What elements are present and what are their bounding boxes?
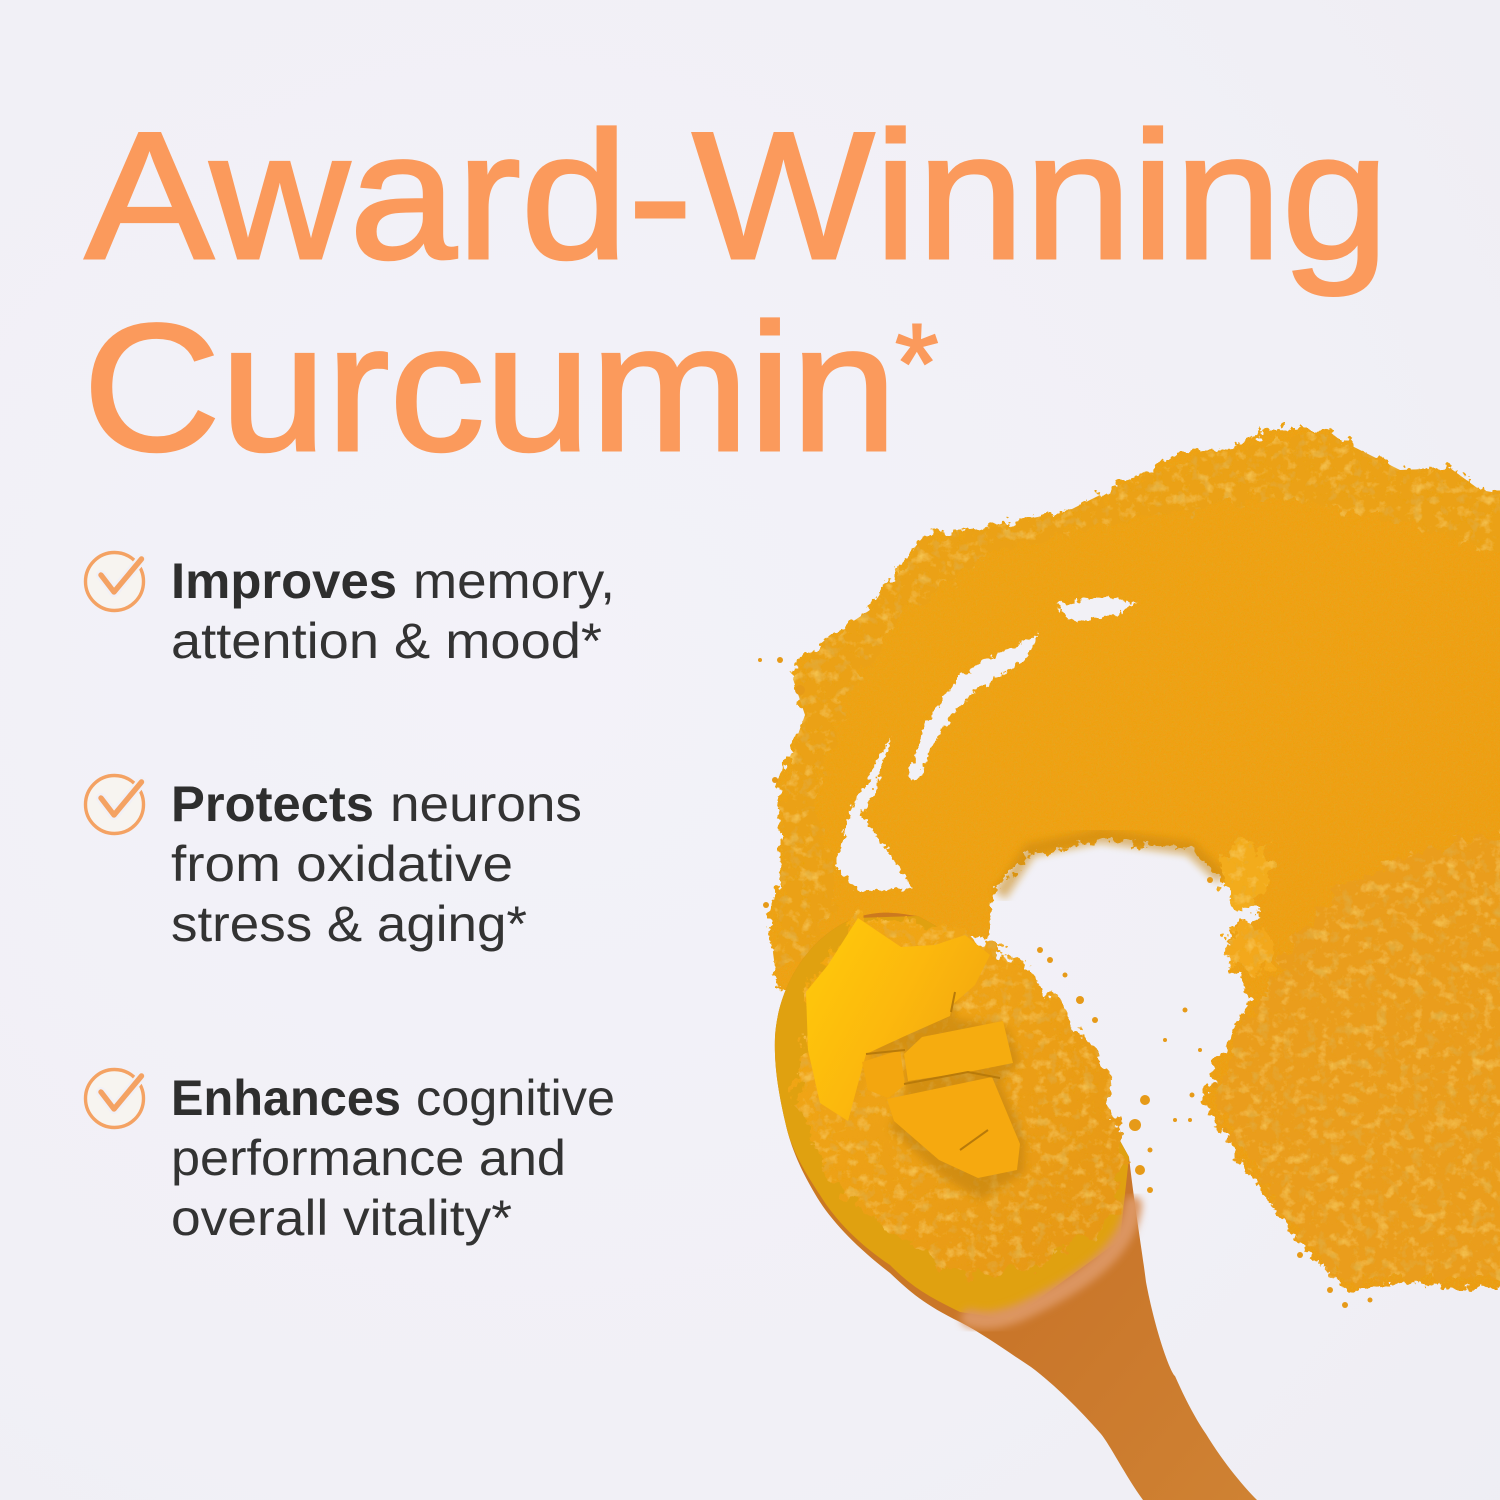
small chunk [862,1050,905,1098]
wooden spoon [775,913,1257,1500]
benefit text: Protects [171,776,374,832]
benefit text: attention & mood* [171,613,602,669]
edge of powder around the hole [1000,836,1222,895]
spoon handle and bowl [775,913,1257,1500]
turmeric powder illustration [758,428,1500,1500]
title: Award-Winning [85,95,1389,297]
benefit text: overall vitality* [171,1190,512,1246]
benefit text: stress & aging* [171,896,527,952]
benefit text: from oxidative [171,836,513,892]
benefit: memory and mood [86,552,615,669]
middle chunk [904,1021,1013,1081]
benefit text [171,776,582,952]
benefit text: Improves [171,553,397,609]
title: * [895,301,939,426]
cracks [866,992,1000,1150]
benefit text [171,553,615,669]
powder heap in the spoon [798,918,1125,1280]
benefit: neuron protection [86,776,582,952]
icon: check mark [86,1070,144,1128]
benefit: cognitive performance [86,1070,615,1246]
benefit text: neurons [390,776,582,832]
chunk shadows [848,950,1025,1200]
icon: check mark [86,776,144,834]
benefit text: performance and [171,1130,566,1186]
benefit text [171,1070,615,1246]
benefit text: cognitive [416,1070,615,1126]
spoon bowl yellow dusting [775,916,1129,1320]
title [83,95,1389,489]
powder lumps [1218,843,1274,975]
powder rim texture [772,432,1500,970]
scattered powder specks [758,657,1372,1308]
gaps in the powder [836,596,1135,892]
lower chunk [887,1077,1020,1178]
pink wood rim [970,1205,1133,1320]
bright cake chunks [806,918,1025,1200]
benefit text: memory, [413,553,615,609]
clumpy powder on the lower right [1215,830,1500,1285]
benefit text: Enhances [171,1070,401,1126]
icon: check mark [86,552,144,610]
large yellow chunk [806,918,990,1121]
powder spread [768,428,1500,1292]
title: Curcumin [83,287,897,489]
